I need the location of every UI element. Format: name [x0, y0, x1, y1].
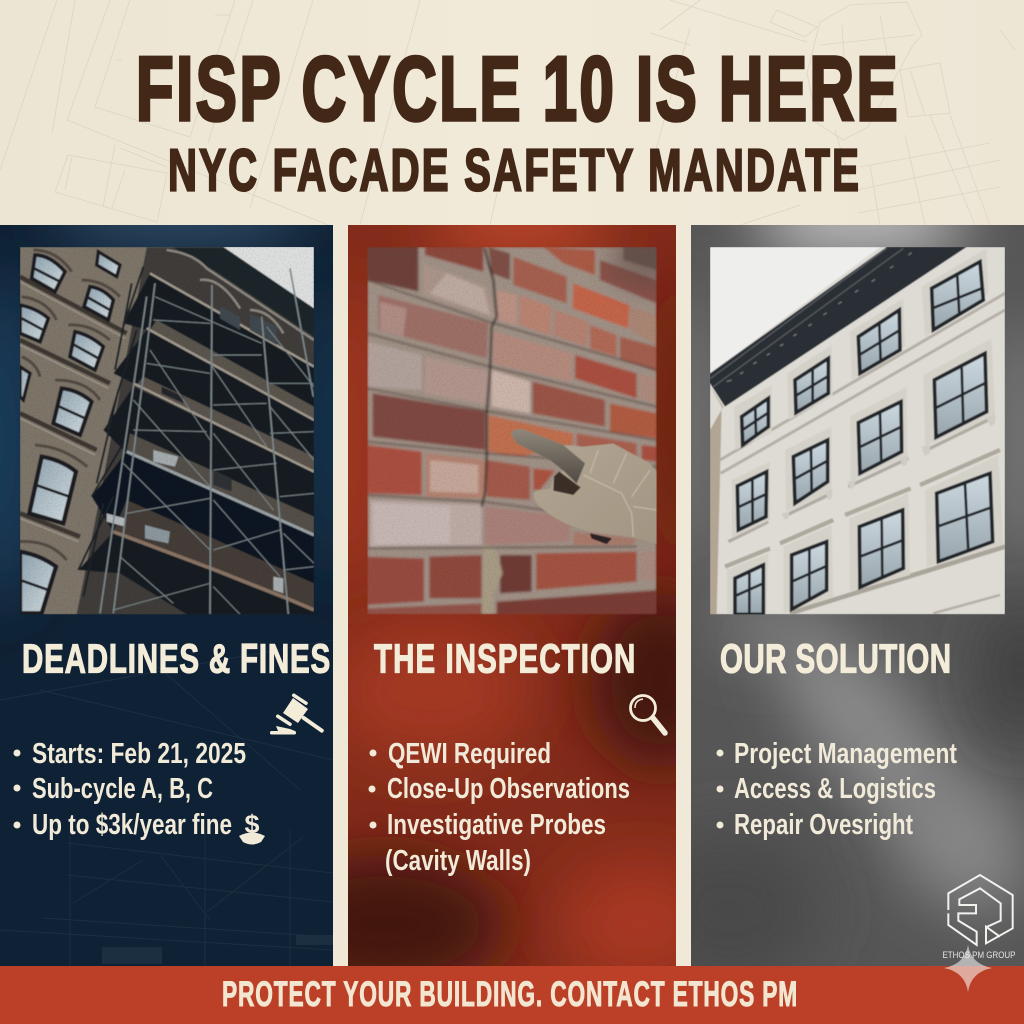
- bullet list: deadlines: Sub-cycle A, B, C: [32, 773, 213, 805]
- logo: Ethos PM Group: [942, 875, 1016, 992]
- bullet list: solution: [716, 738, 957, 841]
- bullet list: inspection: Close-Up Observations: [387, 773, 630, 805]
- panel: deadlines and fines: [0, 187, 351, 966]
- icon: dollar on pile: [239, 809, 265, 844]
- bullet list: solution: Access & Logistics: [734, 773, 936, 805]
- bullet list: inspection: Investigative Probes: [387, 809, 606, 841]
- bullet list: deadlines: [14, 738, 246, 841]
- icon: gavel: [270, 693, 325, 734]
- panel: our solution: [691, 225, 1024, 966]
- bullet list: inspection: (Cavity Walls): [385, 845, 531, 877]
- heading: deadlines and fines: DEADLINES & FINES: [22, 636, 330, 682]
- bullet list: deadlines: Up to $3k/year fine: [32, 809, 232, 841]
- bullet list: solution: Repair Ovesright: [734, 809, 913, 841]
- icon: dollar on pile: $: [244, 809, 260, 839]
- icon: magnifying glass: [630, 696, 665, 733]
- call to action band: [0, 966, 1024, 1024]
- title: FISP CYCLE 10 IS HERE: [136, 39, 898, 140]
- subtitle: NYC FACADE SAFETY MANDATE: [168, 137, 859, 203]
- bullet list: inspection: QEWI Required: [388, 738, 551, 770]
- call to action band: PROTECT YOUR BUILDING. CONTACT ETHOS PM: [222, 975, 797, 1014]
- heading: our solution: OUR SOLUTION: [720, 636, 951, 682]
- photo: restored white building: [710, 247, 1005, 614]
- bullet list: solution: Project Management: [734, 738, 957, 770]
- heading: the inspection: THE INSPECTION: [374, 636, 635, 682]
- photo: gloved hand pointing at cracked brick: [367, 247, 657, 614]
- panel: the inspection: [348, 225, 676, 966]
- photo: scaffolding on building: [20, 247, 314, 614]
- glove shape: [534, 443, 657, 544]
- logo: Ethos PM Group: ETHOS PM GROUP: [942, 950, 1016, 960]
- bullet list: inspection: [368, 738, 630, 877]
- bullet list: deadlines: Starts: Feb 21, 2025: [32, 738, 246, 770]
